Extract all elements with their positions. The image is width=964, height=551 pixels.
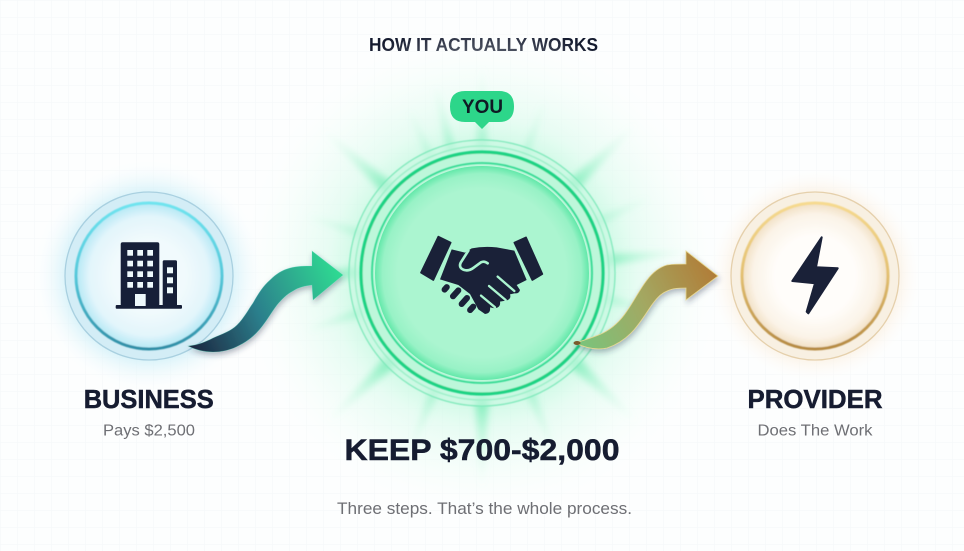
icon: handshake <box>421 237 542 314</box>
arrow: you to provider <box>574 251 718 349</box>
panel: you node <box>349 140 615 406</box>
label: business: BUSINESS <box>84 384 214 414</box>
label: keep amount: KEEP $700-$2,000 <box>344 434 620 467</box>
icon: lightning bolt <box>792 237 838 313</box>
glow: green rays behind centre <box>232 23 732 523</box>
panel: provider node <box>707 168 923 384</box>
label: provider <box>748 384 883 440</box>
label: business: Pays $2,500 <box>103 422 195 440</box>
label: business <box>84 384 214 440</box>
callout: YOU badge <box>450 91 514 129</box>
caption: Three steps. That’s the whole process. <box>337 500 632 518</box>
callout: YOU badge: YOU <box>462 97 503 118</box>
label: provider: PROVIDER <box>748 384 883 414</box>
icon: office building <box>116 242 182 309</box>
arrow tail tip <box>574 341 580 345</box>
panel: business node <box>31 158 267 394</box>
arrow: business to you <box>188 251 343 352</box>
label: provider: Does The Work <box>758 422 873 440</box>
title: HOW IT ACTUALLY WORKS <box>369 35 598 55</box>
